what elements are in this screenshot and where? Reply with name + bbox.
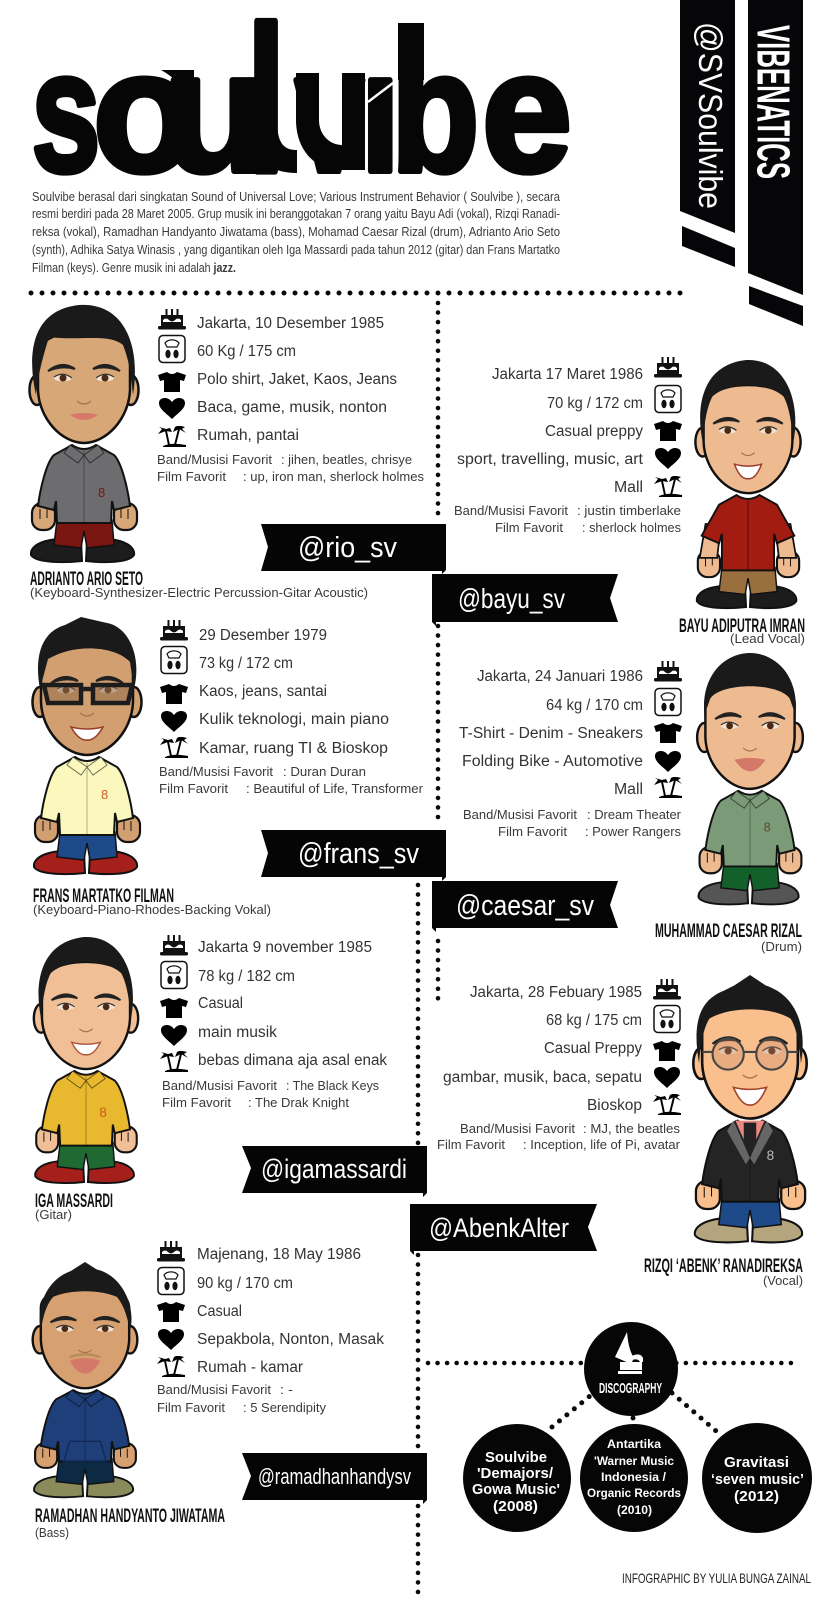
intro paragraph: (synth), Adhika Satya Winasis , yang digantikan oleh Iga Massardi pada tahun 2012 (gitar) dan Frans Martatko: [32, 243, 560, 257]
ribbon: @igamassardi: [242, 1146, 427, 1197]
album: Gravitasi 2012: ‘seven music’: [711, 1471, 804, 1488]
stats: Iga: bebas dimana aja asal enak: [198, 1052, 387, 1069]
album: Gravitasi 2012: (2012): [734, 1488, 779, 1505]
stats: Iga: [160, 935, 387, 1110]
album: Antartika 2010: [580, 1424, 688, 1532]
intro paragraph: resmi berdiri pada 28 Maret 2005. Grup musik ini beranggotakan 7 orang yaitu Bayu Adi (vokal), Rizqi Ranadi-: [32, 207, 560, 221]
name: Rizqi Abenk Ranadireksa: [644, 1256, 803, 1288]
stats: Iga: 78 kg / 182 cm: [198, 968, 295, 985]
ribbon: @frans_sv: [261, 830, 446, 881]
stats: Bayu: Band/Musisi Favorit: [454, 504, 569, 518]
album: Gravitasi 2012: Gravitasi: [724, 1454, 789, 1471]
stats: Iga: Film Favorit: [162, 1096, 232, 1110]
stats: Iga: Casual: [198, 995, 243, 1012]
stats: Frans: [159, 620, 423, 796]
album: Antartika 2010: Indonesia /: [601, 1470, 667, 1484]
album: Antartika 2010: 'Warner Music: [594, 1454, 674, 1468]
stats: Caesar: T-Shirt - Denim - Sneakers: [459, 725, 643, 742]
stats: Iga: Band/Musisi Favorit: [162, 1079, 278, 1093]
logo: soulvibe: i: [360, 16, 400, 208]
name: Frans Martatko Filman: FRANS MARTATKO FILMAN: [33, 886, 174, 907]
name: Adrianto Ario Seto: [30, 569, 368, 600]
ribbon: @rio_sv: [261, 524, 446, 574]
name: Muhammad Caesar Rizal: [655, 921, 802, 954]
character: Frans Martatko Filman: [32, 617, 142, 874]
stats: Frans: : Duran Duran: [283, 765, 366, 779]
stats: Bayu: : sherlock holmes: [582, 521, 681, 535]
ribbon: @ramadhanhandysv: @ramadhanhandysv: [258, 1464, 411, 1489]
ribbon: @AbenkAlter: @AbenkAlter: [429, 1213, 569, 1243]
name: Frans Martatko Filman: (Keyboard-Piano-Rhodes-Backing Vokal): [33, 902, 271, 917]
logo: soulvibe: [34, 18, 570, 176]
intro paragraph: Soulvibe berasal dari singkatan Sound of Universal Love; Various Instrument Behavior ( Soulvibe ), secara: [32, 190, 560, 204]
ribbon: @AbenkAlter: [410, 1204, 597, 1255]
character: Rizqi Abenk Ranadireksa: [693, 975, 807, 1242]
stats: Bayu: Casual preppy: [545, 423, 643, 440]
intro paragraph: [32, 190, 560, 275]
discography badge: [584, 1322, 678, 1416]
name: Ramadhan Handyanto Jiwatama: [35, 1506, 225, 1540]
name: Ramadhan Handyanto Jiwatama: RAMADHAN HANDYANTO JIWATAMA: [35, 1506, 225, 1527]
album: Antartika 2010: Organic Records: [587, 1486, 681, 1500]
ribbon: @bayu_sv: [432, 574, 618, 626]
stats: Ramadhan: Sepakbola, Nonton, Masak: [197, 1331, 384, 1348]
ribbon: @ramadhanhandysv: [242, 1453, 427, 1504]
stats: Rizqi: Film Favorit: [437, 1138, 506, 1152]
stats: Ramadhan: Majenang, 18 May 1986: [197, 1246, 361, 1263]
logo: soulvibe: o: [93, 16, 196, 208]
stats: Rizqi: gambar, musik, baca, sepatu: [443, 1069, 642, 1086]
name: Bayu Adiputra Imran: [679, 616, 805, 646]
intro paragraph: reksa (vokal), Ramadhan Handyanto Jiwatama (bass), Mohamad Caesar Rizal (drum), Adrianto Ario Seto: [32, 225, 560, 239]
stats: Bayu: Jakarta 17 Maret 1986: [492, 366, 643, 383]
album: Soulvibe 2008: Soulvibe: [485, 1450, 547, 1466]
name: Muhammad Caesar Rizal: (Drum): [761, 939, 802, 954]
stats: Frans: : Beautiful of Life, Transformer: [246, 782, 423, 796]
stats: Bayu: : justin timberlake: [577, 504, 681, 518]
album: Antartika 2010: (2010): [617, 1503, 652, 1517]
ribbon: @rio_sv: @rio_sv: [298, 532, 397, 564]
character: Adrianto Ario Seto: [30, 305, 138, 562]
ribbon: @caesar_sv: [432, 881, 618, 932]
name: Rizqi Abenk Ranadireksa: (Vocal): [763, 1273, 803, 1288]
stats: Ramadhan: 90 kg / 170 cm: [197, 1275, 293, 1292]
icon: gramophone: [615, 1332, 643, 1374]
stats: Rizqi: Jakarta, 28 Febuary 1985: [470, 984, 642, 1001]
stats: Ramadhan: Rumah - kamar: [197, 1359, 303, 1376]
stats: Rizqi: Band/Musisi Favorit: [460, 1122, 576, 1136]
discography badge: DISCOGRAPHY: [599, 1380, 662, 1397]
stats: Ramadhan: Casual: [197, 1303, 242, 1320]
character: Bayu Adiputra Imran: [695, 360, 801, 608]
stats: Caesar: Folding Bike - Automotive: [462, 753, 643, 770]
stats: Adrianto: : up, iron man, sherlock holmes: [243, 470, 424, 484]
ribbon: @frans_sv: @frans_sv: [298, 838, 419, 870]
character: Adrianto Ario Seto: 8: [98, 485, 105, 500]
name: Ramadhan Handyanto Jiwatama: (Bass): [35, 1525, 69, 1540]
stats: Caesar: Jakarta, 24 Januari 1986: [477, 668, 643, 685]
stats: Adrianto: Band/Musisi Favorit: [157, 453, 273, 467]
stats: Bayu: Mall: [614, 479, 643, 496]
stats: Bayu: Film Favorit: [495, 521, 564, 535]
character: Frans Martatko Filman: 8: [101, 787, 108, 802]
album: Soulvibe 2008: (2008): [493, 1499, 538, 1515]
character: Iga Massardi: 8: [99, 1105, 107, 1120]
album: Gravitasi 2012: [702, 1423, 812, 1533]
character: Muhammad Caesar Rizal: 8: [764, 821, 771, 835]
logo: soulvibe: s: [32, 15, 100, 208]
stats: Caesar: [459, 661, 682, 839]
stats: Rizqi: : MJ, the beatles: [583, 1122, 680, 1136]
stats: Frans: Kaos, jeans, santai: [199, 683, 327, 700]
stats: Ramadhan: : 5 Serendipity: [243, 1401, 327, 1415]
stats: Iga: Jakarta 9 november 1985: [198, 939, 372, 956]
stats: Caesar: : Power Rangers: [585, 825, 681, 839]
stats: Adrianto: Film Favorit: [157, 470, 227, 484]
stats: Caesar: Mall: [614, 781, 643, 798]
stats: Adrianto: Polo shirt, Jaket, Kaos, Jeans: [197, 371, 397, 388]
stats: Frans: Film Favorit: [159, 782, 229, 796]
banner: @SVSoulvibe: [680, 0, 735, 267]
stats: Bayu: 70 kg / 172 cm: [547, 395, 643, 412]
stats: Frans: Kamar, ruang TI & Bioskop: [199, 740, 388, 757]
stats: Adrianto: Jakarta, 10 Desember 1985: [197, 315, 384, 332]
stats: Caesar: Band/Musisi Favorit: [463, 808, 578, 822]
stats: Rizqi: Bioskop: [587, 1097, 642, 1114]
logo: soulvibe: b: [391, 15, 479, 208]
stats: Caesar: Film Favorit: [498, 825, 568, 839]
stats: Frans: 29 Desember 1979: [199, 627, 327, 644]
name: Iga Massardi: IGA MASSARDI: [35, 1191, 113, 1212]
logo: soulvibe: u: [163, 16, 268, 208]
stats: Adrianto: Baca, game, musik, nonton: [197, 399, 387, 416]
banner: @SVSoulvibe: @SVSoulvibe: [692, 22, 729, 209]
stats: Frans: Band/Musisi Favorit: [159, 765, 274, 779]
character: Muhammad Caesar Rizal: [697, 653, 803, 904]
name: Frans Martatko Filman: [33, 886, 271, 917]
ribbon: @igamassardi: @igamassardi: [261, 1154, 407, 1184]
stats: Rizqi: : Inception, life of Pi, avatar: [523, 1138, 680, 1152]
stats: Adrianto: Rumah, pantai: [197, 427, 299, 444]
stats: Ramadhan: Band/Musisi Favorit: [157, 1383, 272, 1397]
album: Antartika 2010: Antartika: [607, 1437, 661, 1451]
stats: Adrianto: [157, 309, 424, 484]
stats: Ramadhan: : -: [280, 1383, 293, 1397]
stats: Ramadhan: Film Favorit: [157, 1401, 226, 1415]
character: Rizqi Abenk Ranadireksa: 8: [767, 1148, 774, 1163]
name: Iga Massardi: [35, 1191, 113, 1222]
stats: Adrianto: 60 Kg / 175 cm: [197, 343, 296, 360]
stats: Caesar: 64 kg / 170 cm: [546, 697, 643, 714]
logo: soulvibe: e: [482, 16, 572, 208]
album: Soulvibe 2008: Gowa Music': [472, 1482, 560, 1498]
album: Soulvibe 2008: [463, 1424, 571, 1532]
stats: Ramadhan: [157, 1241, 384, 1415]
ribbon: @caesar_sv: @caesar_sv: [456, 890, 594, 922]
name: Bayu Adiputra Imran: (Lead Vocal): [730, 631, 805, 646]
stats: Adrianto: : jihen, beatles, chrisye: [281, 453, 412, 467]
character: Iga Massardi: [34, 937, 138, 1183]
stats: Frans: Kulik teknologi, main piano: [199, 711, 389, 728]
stats: Iga: : The Drak Knight: [248, 1096, 350, 1110]
stats: Rizqi: 68 kg / 175 cm: [546, 1012, 642, 1029]
stats: Bayu: sport, travelling, music, art: [457, 451, 644, 468]
banner: VIBENATICS: VIBENATICS: [748, 25, 800, 179]
logo: soulvibe: v: [295, 15, 364, 208]
stats: Frans: 73 kg / 172 cm: [199, 655, 293, 672]
ribbon: @bayu_sv: @bayu_sv: [458, 583, 565, 614]
name: Adrianto Ario Seto: ADRIANTO ARIO SETO: [30, 569, 143, 590]
name: Iga Massardi: (Gitar): [35, 1207, 72, 1222]
intro paragraph: Filman (keys). Genre musik ini adalah jazz.: [32, 261, 236, 275]
timeline dots: [31, 293, 800, 1595]
stats: Iga: main musik: [198, 1024, 277, 1041]
character: Ramadhan Handyanto Jiwatama: [33, 1262, 137, 1497]
stats: Iga: : The Black Keys: [286, 1079, 379, 1093]
album: Soulvibe 2008: 'Demajors/: [477, 1466, 553, 1482]
stats: Rizqi: Casual Preppy: [544, 1040, 642, 1057]
name: Adrianto Ario Seto: (Keyboard-Synthesizer-Electric Percussion-Gitar Acoustic): [30, 585, 368, 600]
stats: Bayu: [454, 357, 682, 535]
stats: Rizqi: [437, 979, 681, 1152]
stats: Caesar: : Dream Theater: [587, 808, 681, 822]
